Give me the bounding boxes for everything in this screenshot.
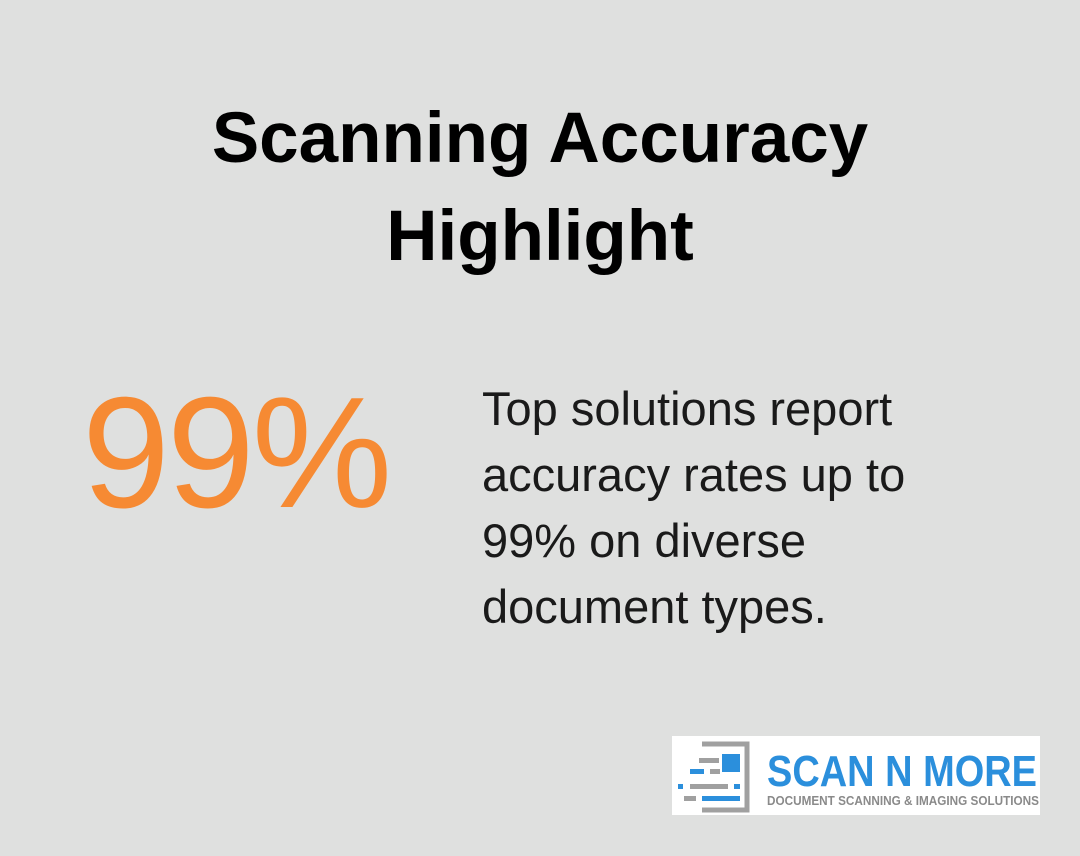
description text: accuracy rates up to [482,448,905,501]
icon: scanner [678,744,747,810]
title [212,99,868,276]
description text [482,382,905,633]
logo [672,736,1040,815]
description text: Top solutions report [482,382,892,435]
title: Scanning Accuracy [212,99,868,178]
description text: 99% on diverse [482,514,806,567]
description text: document types. [482,580,827,633]
big stat: 99% [82,365,389,541]
title: Highlight [386,197,694,276]
